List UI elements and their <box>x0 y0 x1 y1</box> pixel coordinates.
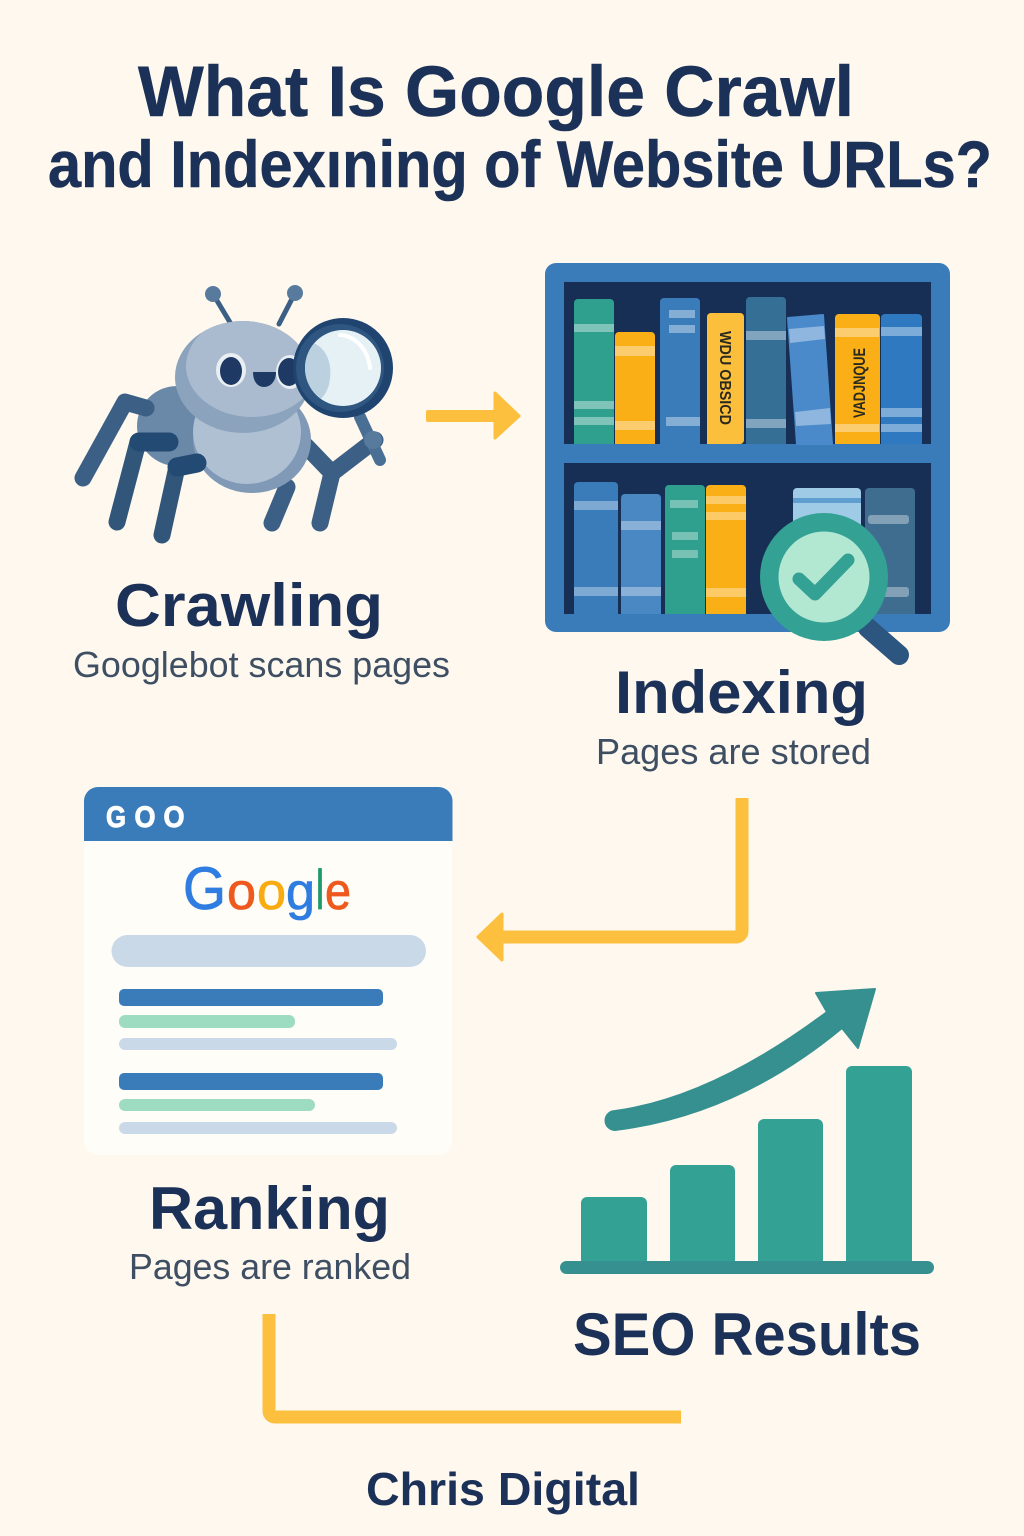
spider face <box>186 321 303 417</box>
browser header label: O <box>164 801 184 834</box>
Google logo: e <box>325 863 351 921</box>
magnifier handle <box>360 417 380 460</box>
panel: Google results page <box>84 787 452 1155</box>
browser header label: O <box>134 801 156 834</box>
caption: Googlebot scans pages: Googlebot scans pages <box>73 644 450 685</box>
browser header <box>84 787 452 841</box>
Google logo: o <box>227 863 256 921</box>
spider lower body <box>193 387 311 493</box>
spider belly <box>193 380 301 484</box>
magnifying glass <box>293 318 393 418</box>
spider rear body <box>137 386 217 466</box>
arrow: indexing to ranking <box>478 798 742 960</box>
icon: spider with magnifying glass <box>83 285 393 535</box>
book spine label: VADJNQUE <box>850 348 869 418</box>
arrow: ranking to SEO results <box>269 1314 681 1417</box>
bottom shelf books <box>574 482 915 614</box>
browser window <box>84 787 452 1155</box>
spider antennae <box>205 285 303 324</box>
Google logo: g <box>286 863 315 921</box>
browser header label: G <box>106 801 126 834</box>
Google logo: o <box>257 863 286 921</box>
icon: bookshelf <box>545 263 950 655</box>
footer: Chris Digital: Chris Digital <box>366 1463 640 1515</box>
title: What Is Google Crawl <box>138 53 854 132</box>
search result 2 <box>119 1073 397 1134</box>
top shelf books <box>574 297 922 444</box>
heading: Ranking: Ranking <box>149 1175 390 1242</box>
spider front legs <box>117 442 177 535</box>
Google logo <box>183 855 351 922</box>
heading: Crawling: Crawling <box>115 572 383 639</box>
bookshelf frame <box>545 263 950 632</box>
heading: Indexing: Indexing <box>615 659 868 726</box>
title <box>48 53 992 201</box>
caption: Pages are ranked: Pages are ranked <box>129 1246 411 1287</box>
Google logo: G <box>183 855 226 922</box>
magnifier grip <box>364 431 382 449</box>
caption: Pages are stored: Pages are stored <box>596 731 871 772</box>
search bar <box>112 935 426 967</box>
spider front leg tops <box>139 442 197 467</box>
search result 1 <box>119 989 397 1050</box>
spider mouth <box>253 372 276 387</box>
magnifier with check mark <box>760 513 899 655</box>
book spine label: WDU OBSICD <box>716 331 733 425</box>
browser header label <box>106 801 184 834</box>
bars <box>581 1066 912 1262</box>
growth arrow <box>606 989 875 1130</box>
spider head <box>175 321 311 433</box>
spider back legs <box>83 402 375 523</box>
arrow: crawling to indexing <box>426 393 519 438</box>
spider eyes <box>216 353 304 389</box>
chart baseline <box>560 1261 934 1274</box>
bar chart: SEO growth <box>560 989 934 1274</box>
Google logo: l <box>316 858 324 921</box>
heading: SEO Results: SEO Results <box>573 1301 921 1368</box>
